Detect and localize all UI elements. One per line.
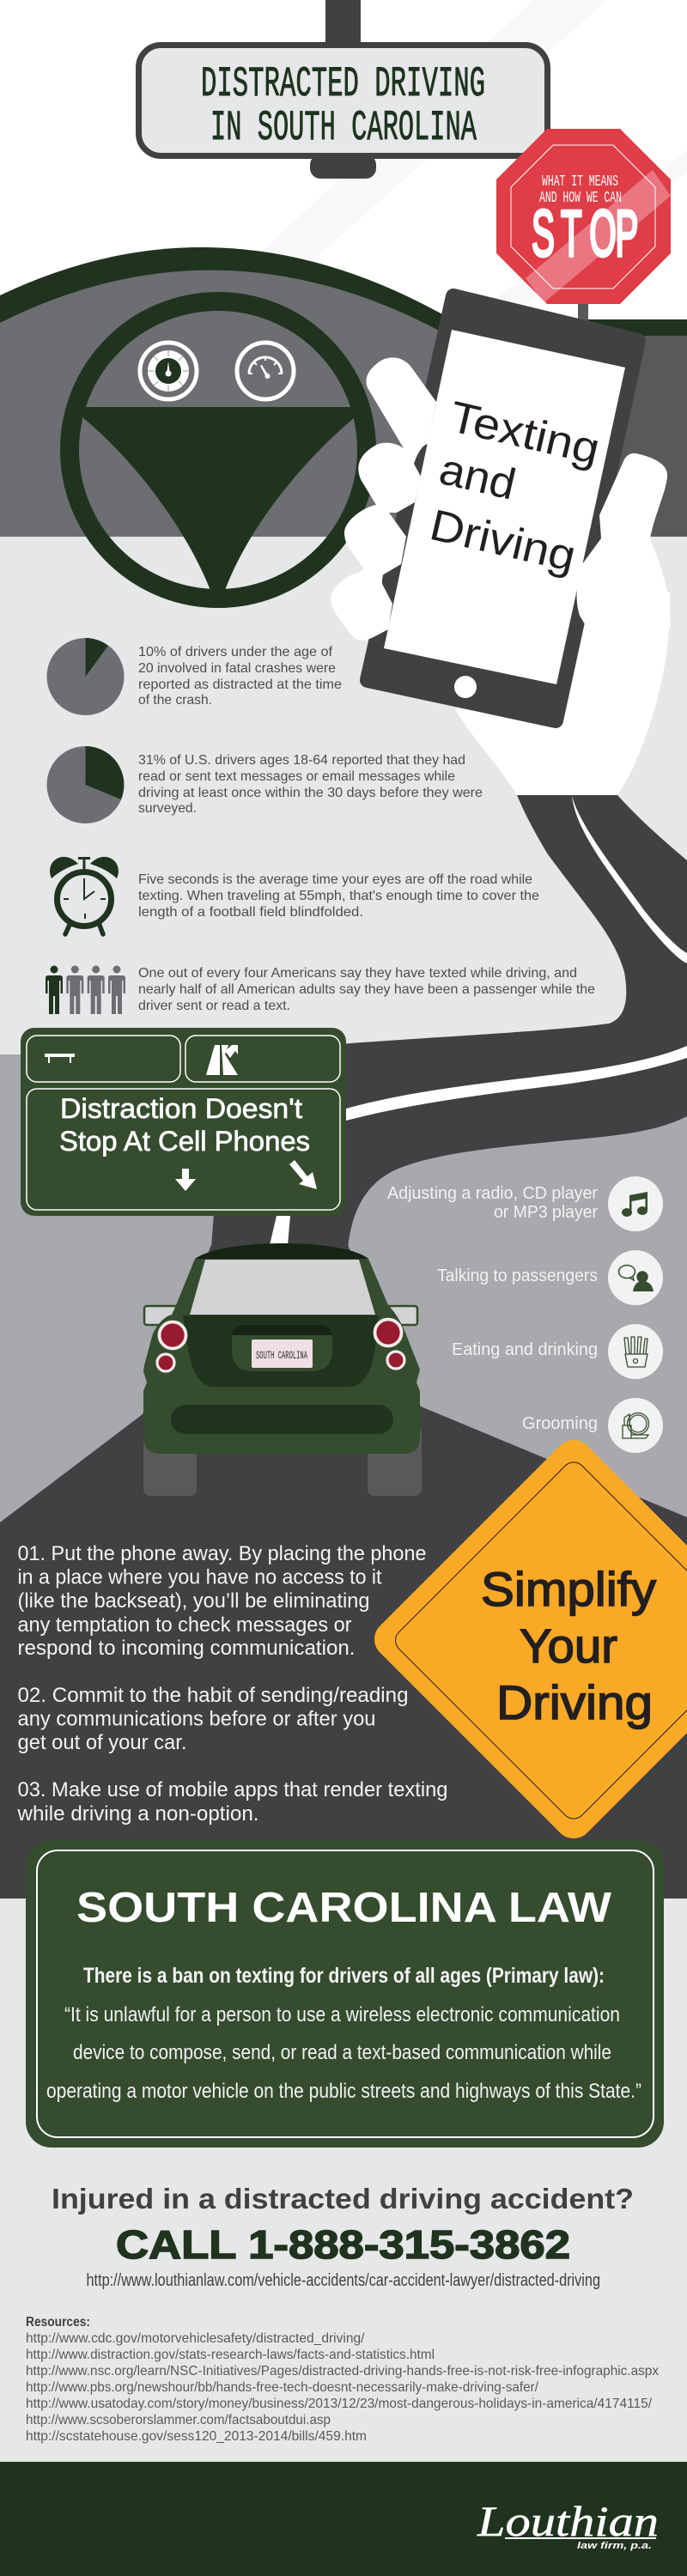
distraction item: passengers [437, 1250, 663, 1305]
stat text: 31 percent [138, 753, 483, 816]
highway sign [21, 1028, 346, 1216]
distraction item: eating: Eating and drinking [452, 1340, 598, 1359]
diamond heading: Simplify [481, 1562, 656, 1616]
tip 03 [16, 1778, 447, 1826]
lower light background [0, 1899, 687, 2462]
stat text: 10 percent: reported as distracted at the time [138, 677, 342, 692]
distraction item: grooming: Grooming [522, 1413, 598, 1433]
stat text: 31 percent: driving at least once within the 30 days before they were [138, 786, 483, 800]
steering wheel [70, 301, 367, 598]
icon: lipstick and mirror [623, 1413, 649, 1438]
stat text: one out of four: driver sent or read a text. [138, 999, 290, 1013]
stat text: 10 percent [138, 645, 342, 708]
title [201, 60, 485, 152]
stat text: 31 percent: surveyed. [138, 801, 197, 816]
icon: four people [46, 965, 125, 1014]
tip 02 [17, 1684, 409, 1754]
car [143, 1243, 422, 1496]
tip 01: any temptation to check messages or [17, 1613, 352, 1637]
logo: Louthian law firm: law firm, p.a. [577, 2541, 652, 2551]
diamond heading: Your [520, 1619, 617, 1673]
resources list: http://www.scsoberorslammer.com/factsaboutdui.asp [26, 2413, 331, 2427]
stop sign [496, 129, 671, 326]
law quote: “It is unlawful for a person to use a wireless electronic communication [64, 2003, 620, 2026]
resources list: Resources: [26, 2315, 90, 2330]
stat text: 10 percent: 10% of drivers under the age of [138, 645, 333, 659]
stat text: one out of four: One out of every four Americans say they have texted while driving, and [138, 966, 577, 981]
phone screen [384, 330, 625, 684]
icon: alarm clock [50, 857, 119, 934]
distraction item: radio: or MP3 player [494, 1202, 598, 1222]
stop sign text: STOP [532, 197, 638, 270]
arrow: down [175, 1169, 196, 1191]
tip 02: any communications before or after you [17, 1707, 376, 1731]
arrow: diagonal [289, 1160, 317, 1189]
tip 01: respond to incoming communication. [17, 1637, 356, 1660]
resources list: http://www.nsc.org/learn/NSC-Initiatives/Pages/distracted-driving-hands-free-is-not-risk-free-infographic.aspx [26, 2364, 659, 2379]
wrist behind phone [455, 592, 670, 795]
resources list: http://www.distraction.gov/stats-research-laws/facts-and-statistics.html [26, 2348, 435, 2362]
diamond heading: Driving [496, 1675, 653, 1729]
tip 02: 02. Commit to the habit of sending/reading [17, 1684, 409, 1707]
title: IN SOUTH CAROLINA [210, 104, 477, 152]
sign heading [59, 1093, 310, 1157]
distraction item: radio [387, 1176, 663, 1231]
footer band [0, 2462, 687, 2576]
sign heading: Stop At Cell Phones [59, 1126, 310, 1157]
title: DISTRACTED DRIVING [201, 60, 485, 108]
warning diamond sign [367, 1432, 687, 1846]
resources list: http://www.pbs.org/newshour/bb/hands-free-tech-doesnt-necessarily-make-driving-safer/ [26, 2380, 539, 2395]
icon: fries [624, 1337, 647, 1367]
stat text: one out of four [138, 966, 595, 1013]
phone number: CALL 1-888-315-3862 [116, 2222, 570, 2267]
thumb over phone [577, 453, 671, 627]
stat text: five seconds: Five seconds is the average time your eyes are off the road while [138, 872, 532, 887]
tip 02: get out of your car. [17, 1731, 187, 1754]
background: windshield, ground and mid-tone bands [0, 0, 687, 1570]
resources list [26, 2315, 659, 2444]
stat text: five seconds [138, 872, 539, 920]
icon: person talking [618, 1266, 654, 1291]
distraction item: grooming [522, 1398, 663, 1453]
distraction item: passengers: Talking to passengers [437, 1266, 598, 1285]
stat text: 31 percent: 31% of U.S. drivers ages 18-64 reported that they had [138, 753, 465, 768]
distraction item: radio: Adjusting a radio, CD player [387, 1183, 598, 1203]
stat text: 10 percent: of the crash. [138, 693, 212, 708]
logo: Louthian law firm: Louthian [477, 2497, 659, 2545]
icon: speedometer [237, 343, 294, 399]
stat text: 31 percent: read or sent text messages or email messages while [138, 769, 455, 784]
icon: fuel gauge [140, 343, 197, 399]
stat text: five seconds: texting. When traveling at 55mph, that's enough time to cover the [138, 889, 539, 903]
home button [454, 676, 477, 698]
stop sign text: WHAT IT MEANS [542, 173, 618, 191]
phone text: Texting and Driving [426, 392, 605, 580]
icon: overpass [45, 1054, 75, 1063]
tip 01: (like the backseat), you’ll be eliminating [17, 1589, 369, 1613]
phone [368, 296, 638, 720]
diamond heading [481, 1562, 656, 1729]
fingers over phone [331, 357, 436, 641]
icon: music note [622, 1192, 647, 1217]
panel: South Carolina law [26, 1840, 664, 2148]
stop sign text: AND HOW WE CAN [539, 190, 622, 207]
pie chart: 10 percent [46, 638, 124, 715]
distraction item: eating [452, 1324, 663, 1379]
phone text: Texting and Driving: Texting [446, 392, 605, 474]
law quote [46, 2003, 641, 2103]
rear-view mirror with title [139, 0, 548, 179]
icon: exit ramp [206, 1045, 238, 1075]
sign heading: Distraction Doesn't [60, 1093, 302, 1124]
law heading: SOUTH CAROLINA LAW [76, 1885, 612, 1931]
resources list: http://www.cdc.gov/motorvehiclesafety/distracted_driving/ [26, 2331, 365, 2346]
call to action question: Injured in a distracted driving accident? [52, 2183, 634, 2215]
resources list: http://www.usatoday.com/story/money/business/2013/12/23/most-dangerous-holidays-in-america/4174115/ [26, 2397, 653, 2411]
tip 03: 03. Make use of mobile apps that render texting [17, 1778, 448, 1801]
license plate text: SOUTH CAROLINA [256, 1349, 307, 1362]
pie chart: 31 percent [46, 746, 124, 823]
stat text: one out of four: nearly half of all American adults say they have been a passenger while the [138, 982, 595, 997]
stat text: 10 percent: 20 involved in fatal crashes were [138, 661, 336, 676]
dashboard [0, 247, 687, 537]
winding road [0, 795, 687, 1899]
phone text: Texting and Driving: and [435, 444, 520, 509]
phone text: Texting and Driving: Driving [426, 500, 581, 580]
tip 01 [17, 1542, 426, 1660]
tip 01: in a place where you have no access to it [17, 1566, 382, 1589]
tip 01: 01. Put the phone away. By placing the phone [17, 1542, 426, 1565]
stat text: five seconds: length of a football field blindfolded. [138, 905, 363, 920]
law quote: device to compose, send, or read a text-based communication while [73, 2041, 611, 2064]
resources list: http://scstatehouse.gov/sess120_2013-2014/bills/459.htm [26, 2429, 367, 2444]
tip 03: while driving a non-option. [16, 1802, 258, 1826]
